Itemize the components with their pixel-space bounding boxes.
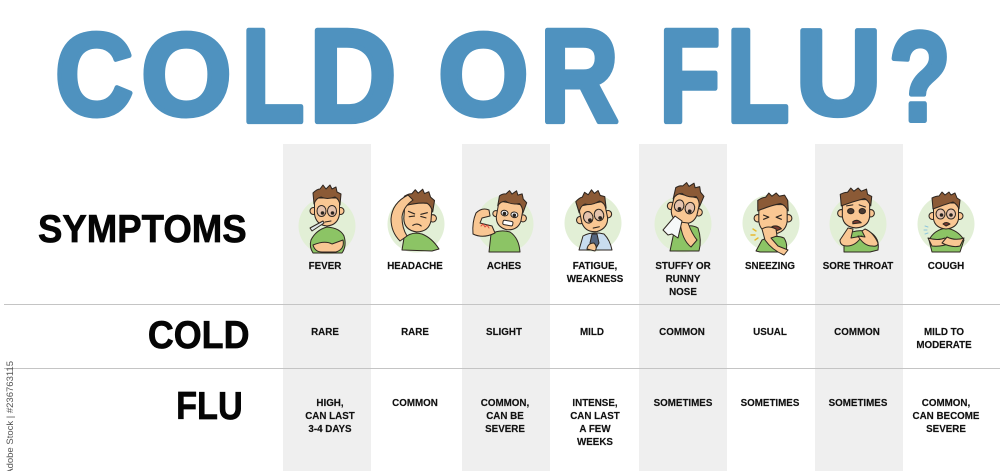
icon: headache — [388, 188, 444, 252]
label: sore throat: SORE THROAT — [823, 261, 893, 272]
icon: stuffy nose — [654, 178, 712, 252]
column band: aches — [462, 144, 550, 471]
flu: headache: COMMON — [392, 398, 438, 409]
title — [55, 2, 951, 150]
label: fatigue: WEAKNESS — [567, 274, 623, 285]
flu: sneezing: SOMETIMES — [741, 398, 799, 409]
label: aches: ACHES — [487, 261, 521, 272]
icon: cough — [918, 192, 974, 252]
flu: fever: 3-4 DAYS — [308, 424, 352, 435]
flu: sore throat: SOMETIMES — [829, 398, 887, 409]
label: stuffy nose: NOSE — [669, 287, 697, 298]
flu: fatigue: INTENSE, — [572, 398, 618, 409]
title: U — [796, 5, 882, 141]
column band: fever — [283, 144, 371, 471]
title: F — [659, 2, 720, 150]
flu: fatigue: WEEKS — [577, 437, 613, 448]
icon: fever — [298, 185, 356, 254]
icon: sneezing — [742, 193, 800, 255]
icon: aches — [473, 187, 534, 252]
cold: stuffy nose: COMMON — [659, 327, 705, 338]
flu: fatigue — [570, 398, 620, 448]
flu: aches: CAN BE — [486, 411, 524, 422]
flu: cough: SEVERE — [926, 424, 966, 435]
label: headache: HEADACHE — [387, 261, 443, 272]
label: fatigue: FATIGUE, — [573, 261, 617, 272]
title: C — [55, 9, 133, 141]
label: stuffy nose: RUNNY — [666, 274, 700, 285]
flu: fever: CAN LAST — [305, 411, 355, 422]
flu: cough: COMMON, — [922, 398, 970, 409]
title: O — [141, 9, 232, 141]
label: stuffy nose — [655, 261, 711, 298]
cold: fever: RARE — [311, 327, 339, 338]
heading: flu: FLU — [176, 384, 243, 428]
label: fatigue — [566, 261, 623, 285]
column band: stuffy nose — [639, 144, 727, 471]
cold: cough: MODERATE — [916, 340, 972, 351]
cold: sore throat: COMMON — [834, 327, 880, 338]
cold: aches: SLIGHT — [486, 327, 522, 338]
flu: aches: SEVERE — [485, 424, 525, 435]
title: L — [242, 2, 304, 150]
heading: symptoms: SYMPTOMS — [38, 208, 247, 250]
flu: cough: CAN BECOME — [913, 411, 979, 422]
cold: sneezing: USUAL — [753, 327, 787, 338]
cold: fatigue: MILD — [580, 327, 604, 338]
cold: cough — [916, 327, 972, 351]
flu: fever: HIGH, — [316, 398, 344, 409]
column band: sore throat — [815, 144, 903, 471]
flu: fever — [305, 398, 355, 435]
flu: fatigue: A FEW — [579, 424, 611, 435]
cold: cough: MILD TO — [924, 327, 964, 338]
icon: sore throat — [830, 188, 886, 252]
flu: stuffy nose: SOMETIMES — [654, 398, 712, 409]
flu: cough — [912, 398, 980, 435]
label: fever: FEVER — [309, 261, 341, 272]
flu: aches — [481, 398, 529, 435]
title: ? — [889, 6, 951, 148]
label: cough: COUGH — [928, 261, 964, 272]
cold: headache: RARE — [401, 327, 429, 338]
title: L — [726, 2, 789, 150]
flu: fatigue: CAN LAST — [570, 411, 620, 422]
title: R — [540, 2, 619, 150]
label: stuffy nose: STUFFY OR — [655, 261, 711, 272]
heading: cold: COLD — [147, 314, 249, 357]
label: sneezing: SNEEZING — [745, 261, 795, 272]
title: O — [438, 9, 529, 141]
flu: aches: COMMON, — [481, 398, 529, 409]
icon: fatigue — [564, 187, 622, 252]
title: D — [309, 2, 396, 150]
